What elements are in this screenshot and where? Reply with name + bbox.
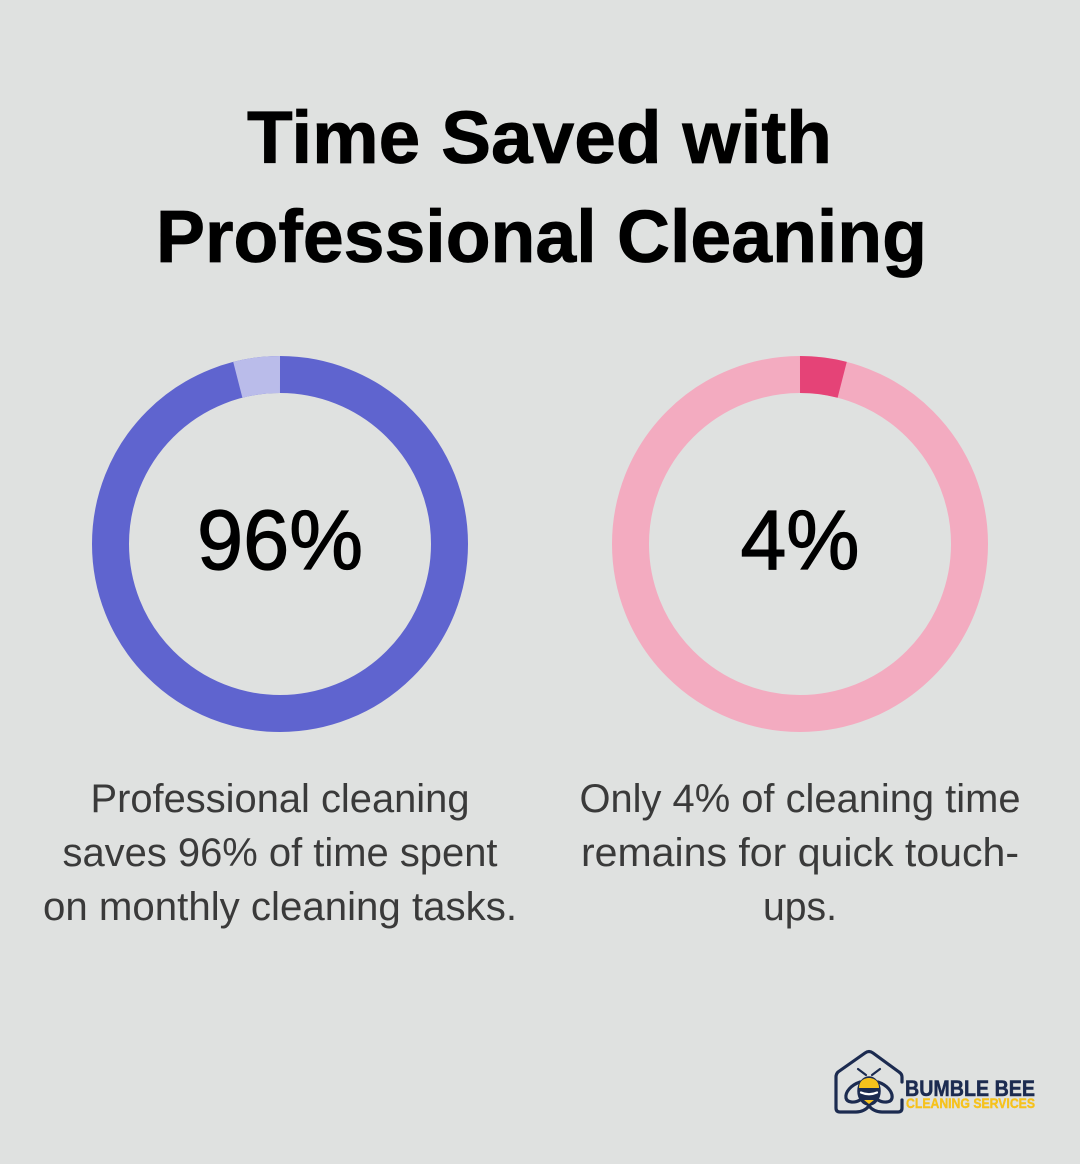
description: 96 percent (43, 777, 517, 929)
donut chart: 96 percent (110, 374, 450, 714)
description: 4 percent: Only 4% of cleaning time (580, 777, 1020, 821)
description: 96 percent: on monthly cleaning tasks. (43, 885, 517, 929)
donut chart: 4 percent (630, 374, 970, 714)
logo: Bumble Bee Cleaning Services: CLEANING SERVICES (906, 1096, 1035, 1111)
value: 96%: 96% (197, 493, 363, 587)
description: 96 percent: Professional cleaning (90, 777, 470, 821)
title: Professional Cleaning (156, 195, 927, 278)
panel: 4 percent (580, 374, 1020, 929)
description: 4 percent (580, 777, 1020, 929)
description: 96 percent: saves 96% of time spent (62, 831, 498, 875)
icon: house with bee (836, 1052, 902, 1112)
wordmark: BUMBLE BEE (905, 1076, 1035, 1101)
title (156, 96, 927, 278)
value: 4%: 4% (740, 493, 860, 587)
logo: Bumble Bee Cleaning Services (836, 1052, 1035, 1112)
title: Time Saved with (247, 96, 832, 179)
description: 4 percent: remains for quick touch- (581, 831, 1019, 875)
panel: 96 percent (43, 374, 517, 929)
description: 4 percent: ups. (763, 885, 837, 929)
